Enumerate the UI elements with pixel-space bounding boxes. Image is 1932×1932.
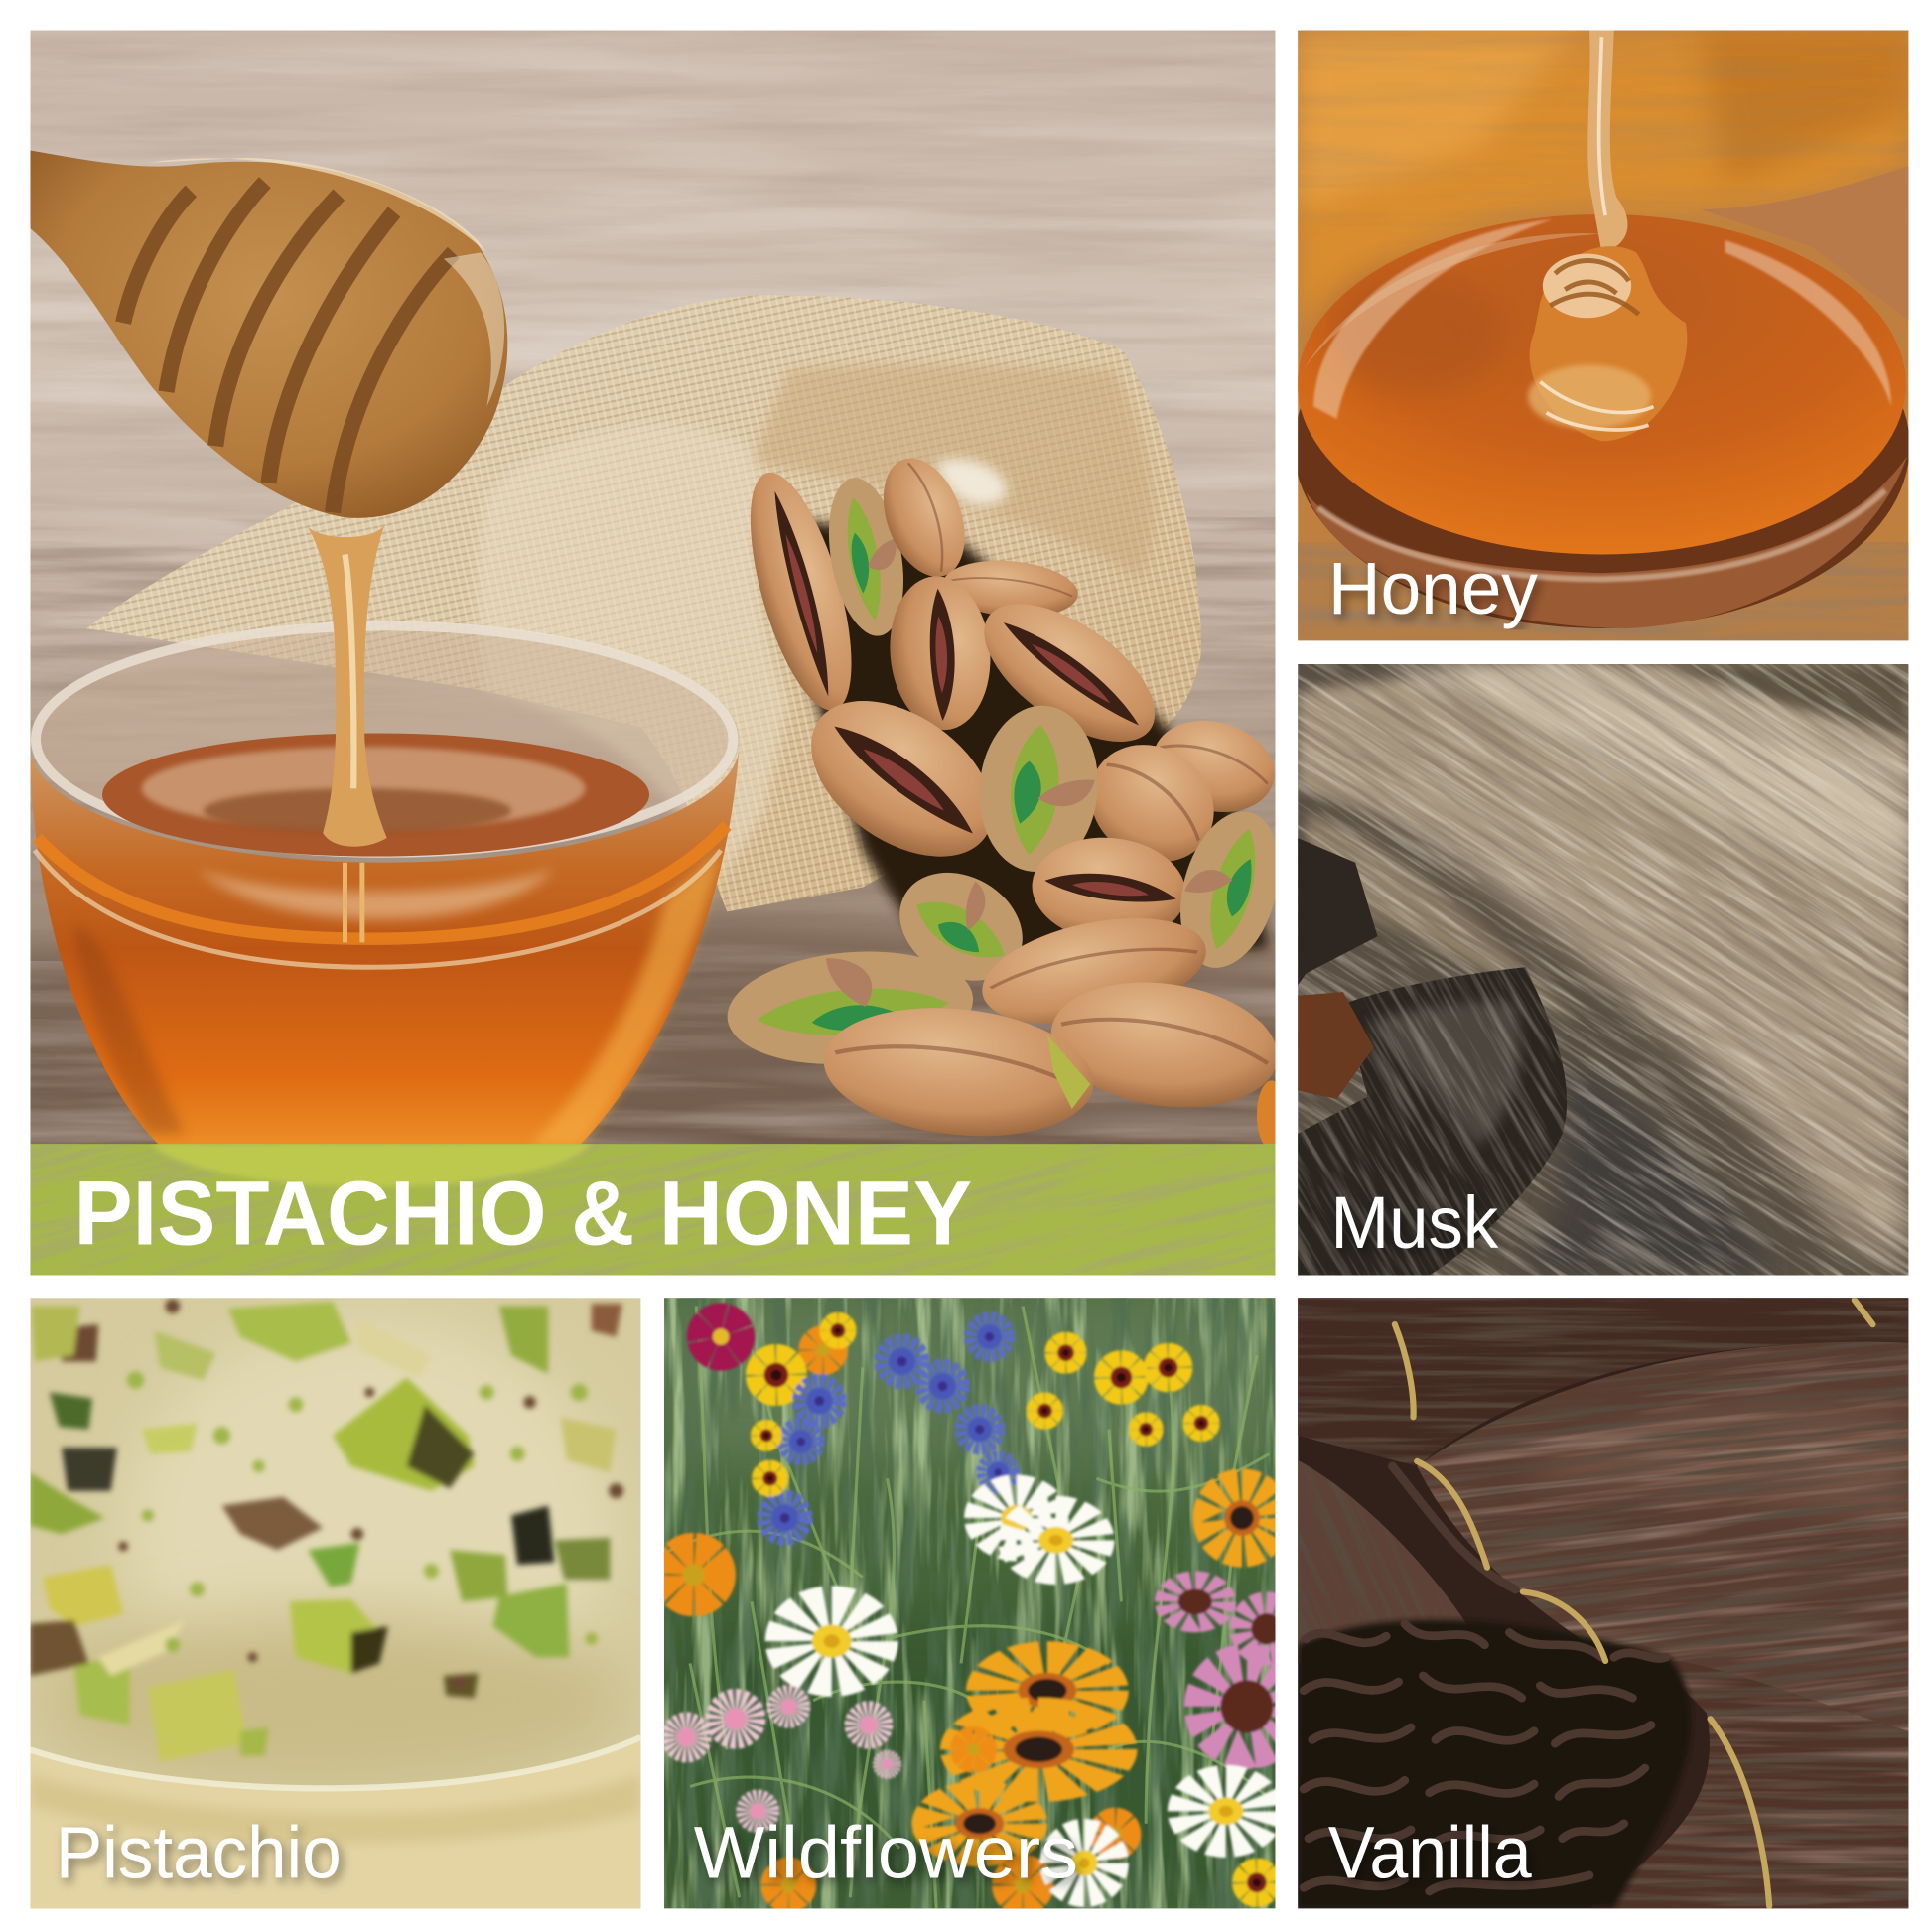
honey drip and swirl bbox=[1528, 30, 1687, 441]
fur bbox=[1016, 371, 1932, 1565]
flowers bbox=[668, 1316, 1291, 1903]
cream background bbox=[30, 1298, 642, 1910]
honey stream bbox=[308, 525, 387, 942]
label: Musk: Musk bbox=[1330, 1181, 1499, 1264]
pile of pistachios bbox=[723, 447, 1295, 1150]
label: Wildflowers: Wildflowers bbox=[694, 1811, 1078, 1893]
yellow twine ties bbox=[1395, 1300, 1872, 1906]
wooden honey dipper bbox=[30, 150, 507, 518]
honey pool bbox=[1298, 214, 1906, 554]
burlap sack bbox=[86, 295, 1201, 911]
label: Honey: Honey bbox=[1328, 547, 1539, 629]
panel: vanilla bbox=[1122, 1191, 1932, 1908]
wooden table background bbox=[0, 30, 1294, 1294]
label: Pistachio: Pistachio bbox=[56, 1811, 342, 1893]
banner background bbox=[30, 1144, 1275, 1275]
panel: pistachio and honey hero photo bbox=[0, 30, 1295, 1294]
vanilla bean bundles bbox=[1122, 1191, 1932, 1908]
meadow foliage bbox=[653, 1282, 1288, 1908]
panel: pistachio dessert bbox=[30, 1298, 642, 1910]
dark musk resin rocks bbox=[1156, 835, 1727, 1408]
pistachio pieces bbox=[30, 1299, 623, 1762]
panel: honey bbox=[1294, 30, 1910, 640]
glass bowl of honey bbox=[30, 622, 740, 1152]
wooden spoon bbox=[1294, 167, 1910, 628]
wood backdrop bbox=[1298, 30, 1908, 640]
dried vanilla curls bbox=[1298, 1466, 1692, 1908]
panel: green title banner bbox=[30, 1144, 1275, 1275]
label: Vanilla: Vanilla bbox=[1328, 1811, 1532, 1893]
panel: musk bbox=[1016, 371, 1932, 1565]
title: PISTACHIO & HONEY bbox=[73, 1163, 972, 1264]
panel: wildflowers bbox=[653, 1282, 1291, 1908]
